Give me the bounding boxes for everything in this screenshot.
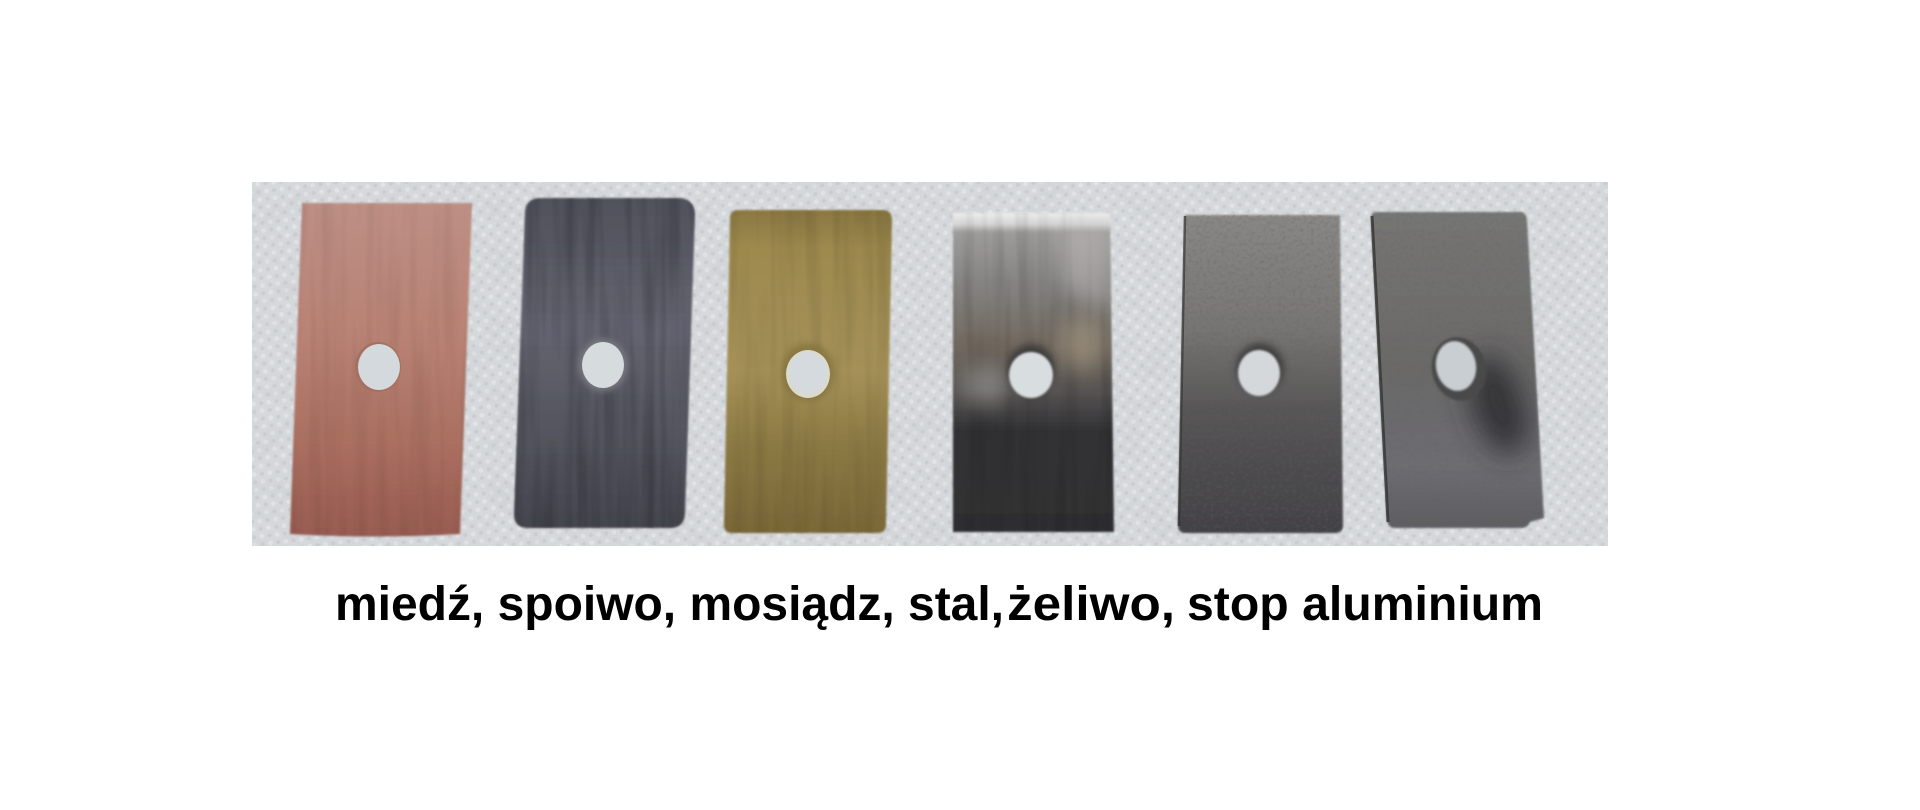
panel: photo of six metal samples on paper towel [252,182,1608,546]
sample: steel plate [953,213,1114,532]
caption [335,578,1543,631]
paper towel background [252,182,1608,546]
caption: miedź, spoiwo, mosiądz, stal, [335,578,1004,631]
sample: brass plate [724,210,892,533]
sample: solder plate [514,198,695,528]
sample: cast iron plate [1178,215,1343,533]
caption: stop aluminium [1187,578,1543,631]
caption: żeliwo, [1007,578,1175,631]
infographic: metal samples photo with caption [252,182,1608,630]
sample: copper plate [290,203,472,536]
sample: aluminium alloy plate [1371,212,1544,528]
